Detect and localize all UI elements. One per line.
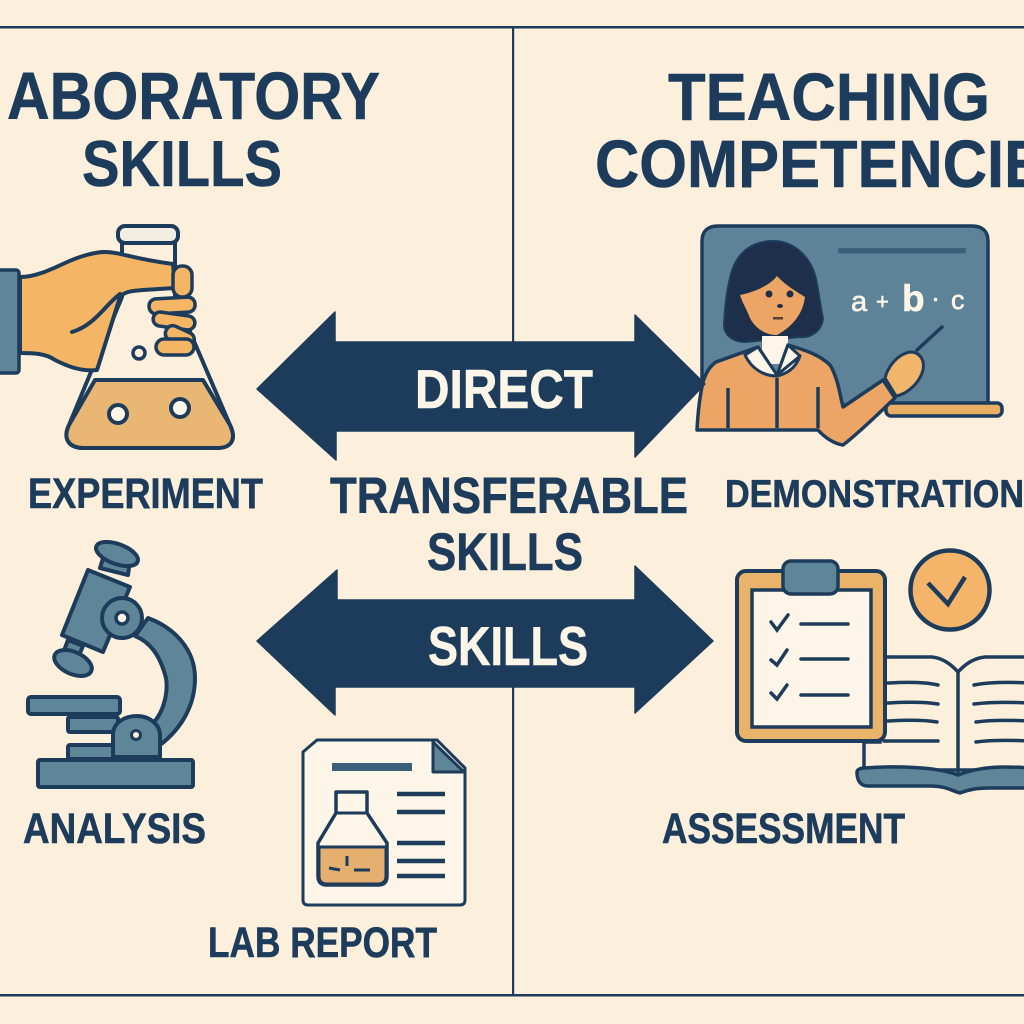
label: experiment: EXPERIMENT [28,470,263,518]
arrow: direct: DIRECT [415,358,593,420]
icon: clipboard and checkmark badge [737,550,990,741]
teacher [697,241,923,445]
chalkboard [702,226,988,405]
label: lab report: LAB REPORT [208,919,437,967]
heading: laboratory skills: SKILLS [82,127,282,200]
formula: · [933,290,939,310]
icon: open book [857,657,1024,793]
label: analysis: ANALYSIS [23,805,206,853]
sleeve [0,270,19,373]
label: assessment: ASSESSMENT [662,805,905,853]
arrow: skills: SKILLS [428,615,588,677]
formula: b [902,278,925,319]
icon: lab report [303,740,465,905]
formula: c [951,285,964,315]
formula: + [876,289,889,314]
heading: teaching competencies [595,60,1024,202]
icon: microscope [28,537,195,787]
icon: teacher at chalkboard [697,226,1002,445]
icon: hand holding flask [0,226,233,448]
formula [851,278,964,319]
heading: transferable skills: SKILLS [427,523,583,582]
heading: teaching competencies: TEACHING [668,60,990,135]
arrow: direct [257,312,705,460]
flask [66,226,233,448]
arrow: skills [257,566,713,715]
heading: laboratory skills: ABORATORY [7,59,380,134]
heading: laboratory skills [7,59,380,200]
formula: a [851,286,868,318]
pointer [917,327,942,350]
heading: transferable skills [330,467,688,582]
hand [20,252,197,370]
heading: transferable skills: TRANSFERABLE [330,467,688,524]
